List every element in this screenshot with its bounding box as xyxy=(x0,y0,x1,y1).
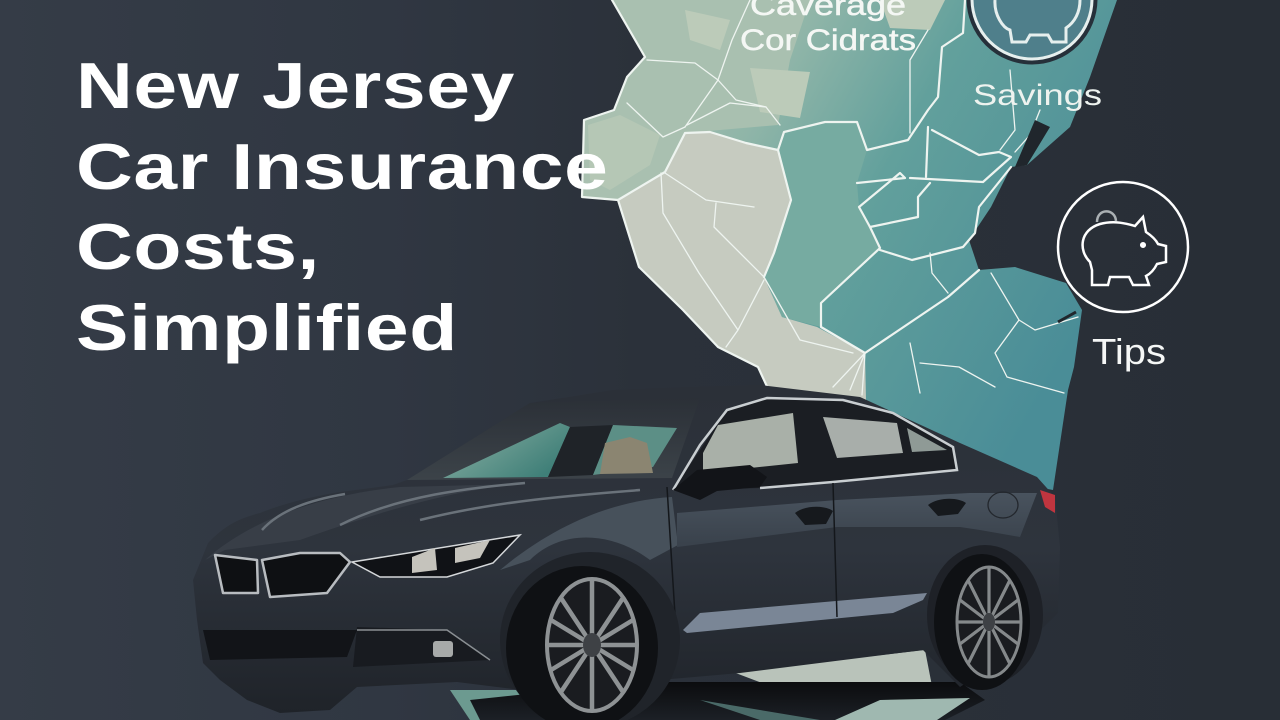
headlight lamps xyxy=(412,540,490,573)
window chrome xyxy=(673,398,957,490)
icon: piggy bank with coin xyxy=(1058,182,1188,312)
lower intake xyxy=(203,630,357,660)
icon: piggy bank top xyxy=(969,0,1095,62)
ground map strip xyxy=(450,650,985,720)
tail light xyxy=(1040,490,1055,513)
grille left xyxy=(215,555,258,593)
grille right xyxy=(262,553,350,597)
map label: coverage: Cor Cidrats xyxy=(740,24,916,57)
map inlet xyxy=(1015,120,1050,167)
label: savings: Savings xyxy=(973,79,1102,112)
title: Car Insurance xyxy=(76,130,608,202)
headlight xyxy=(352,535,520,577)
windshield rear glass xyxy=(593,425,677,475)
map of New Jersey xyxy=(582,0,1117,490)
hood highlights xyxy=(205,484,520,560)
title: Costs, xyxy=(76,210,320,283)
windshield frame xyxy=(407,398,700,480)
windshield glass xyxy=(443,423,570,478)
title xyxy=(76,49,608,364)
fender highlight xyxy=(500,497,678,570)
front door glass xyxy=(703,413,798,473)
map label: coverage xyxy=(740,0,916,57)
car xyxy=(193,385,1060,720)
shoulder highlight xyxy=(677,493,1037,547)
fog lamp surround xyxy=(353,627,490,667)
title: Simplified xyxy=(76,290,458,364)
rear wheel xyxy=(934,554,1030,690)
front wheel arch xyxy=(500,552,680,720)
front wheel xyxy=(506,566,658,720)
map patch: pale south-west xyxy=(618,132,866,400)
lower door highlight xyxy=(683,593,927,633)
door lines xyxy=(667,483,837,647)
fog lamp xyxy=(433,641,453,657)
quarter glass xyxy=(907,428,947,452)
title: New Jersey xyxy=(76,49,515,122)
mirror xyxy=(673,465,767,500)
map patch: light top fields xyxy=(685,0,945,118)
front seat xyxy=(600,437,653,474)
side window xyxy=(673,398,957,490)
label: tips: Tips xyxy=(1092,331,1166,372)
car body xyxy=(193,385,1060,713)
map patch: pale north-west xyxy=(582,0,810,200)
map border lines xyxy=(582,0,1078,395)
map coast mark xyxy=(1058,312,1076,322)
door handles xyxy=(795,499,966,525)
map patch: west inset xyxy=(588,115,660,190)
rear door glass xyxy=(823,417,903,458)
fuel door xyxy=(988,492,1018,518)
map patch: central green xyxy=(764,122,880,327)
windshield pillar xyxy=(548,425,613,477)
rear wheel arch xyxy=(927,545,1043,685)
